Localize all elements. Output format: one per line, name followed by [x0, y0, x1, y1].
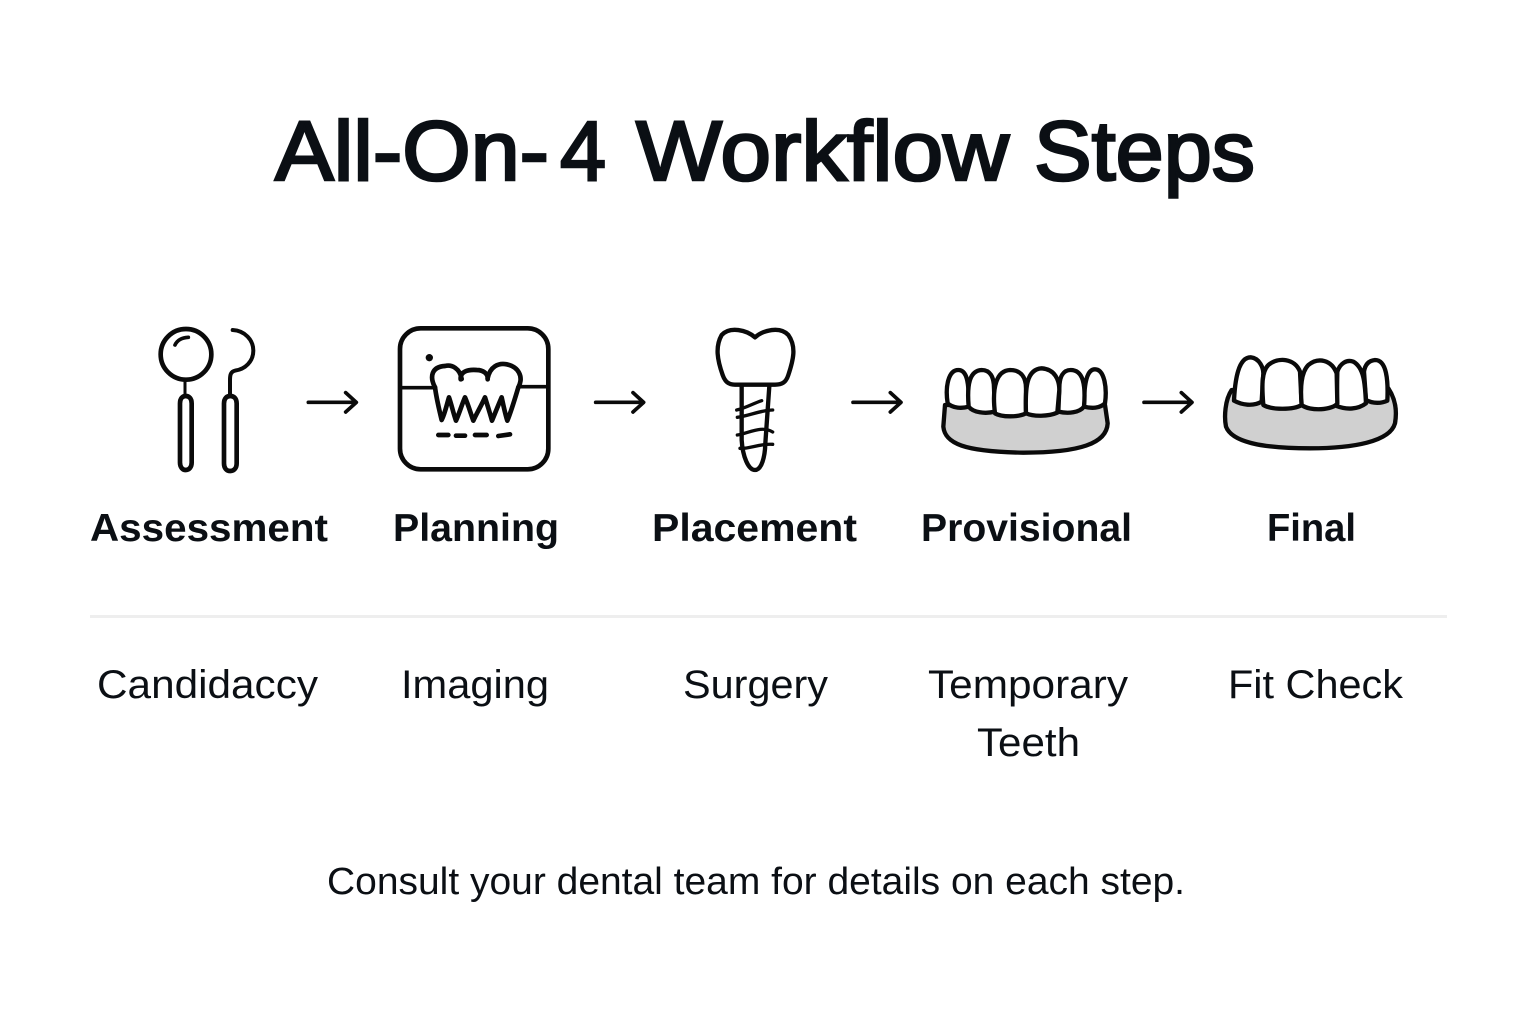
icon: dental mirror and probe: [161, 329, 253, 471]
step detail: Temporary Teeth: [928, 663, 1128, 765]
title: Steps: [1034, 104, 1255, 198]
icon: dental x-ray panel: [400, 328, 548, 469]
arrow 2: [596, 393, 644, 412]
title: 4: [560, 104, 606, 198]
icon: provisional denture: [943, 368, 1108, 453]
step detail: Temporary Teeth: Teeth: [977, 721, 1080, 765]
step detail: Surgery: Surgery: [683, 663, 828, 707]
step label: Planning: Planning: [393, 507, 559, 550]
icon: implant with crown: [718, 330, 793, 470]
step detail: Temporary Teeth: Temporary: [928, 663, 1128, 707]
step detail: Fit Check: Fit Check: [1228, 663, 1404, 707]
step label: Placement: Placement: [652, 507, 857, 550]
title: All-On-: [275, 104, 549, 198]
step label: Final: Final: [1267, 507, 1356, 550]
step detail: Candidaccy: Candidaccy: [97, 663, 318, 707]
step detail: Imaging: Imaging: [401, 663, 549, 707]
arrow 1: [308, 393, 356, 412]
footer note: Consult your dental team for details on each step.: [327, 861, 1185, 903]
step label: Provisional: Provisional: [921, 507, 1132, 550]
title: [275, 104, 1255, 198]
icon: final teeth: [1225, 357, 1396, 448]
arrow 3: [853, 393, 901, 412]
title: Workflow: [636, 104, 1009, 198]
arrow 4: [1144, 393, 1192, 412]
step label: Assessment: Assessment: [90, 507, 328, 550]
